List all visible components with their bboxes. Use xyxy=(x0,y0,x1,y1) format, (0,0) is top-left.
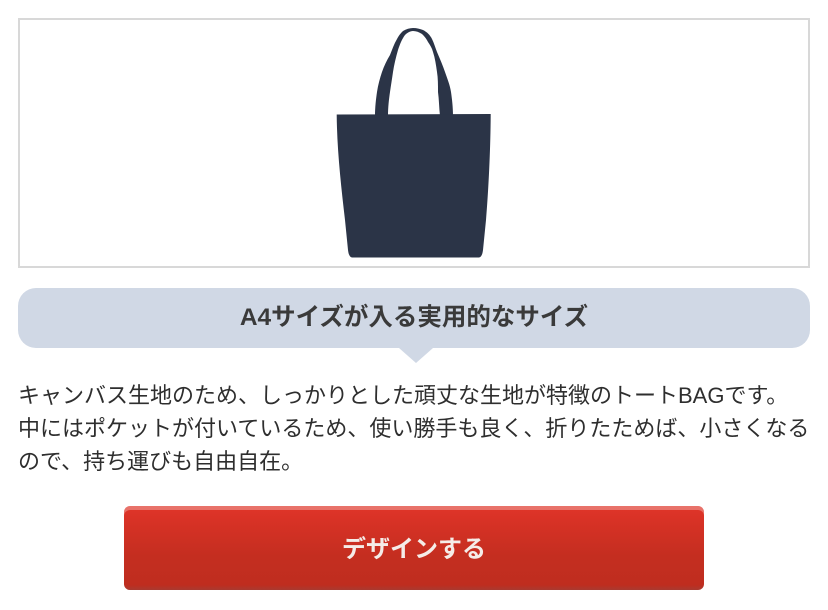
design button: デザインする xyxy=(342,536,486,563)
description text: キャンバス生地のため、しっかりとした頑丈な生地が特徴のトートBAGです。 xyxy=(18,383,788,408)
design button xyxy=(124,506,704,590)
banner pointer xyxy=(399,348,433,363)
product image panel xyxy=(18,18,810,268)
heading banner with pointer xyxy=(18,288,810,363)
heading text: A4サイズが入る実用的なサイズ xyxy=(240,304,588,331)
description text: ので、持ち運びも自由自在。 xyxy=(18,449,303,474)
description text xyxy=(18,383,809,474)
icon: navy tote bag xyxy=(336,28,491,258)
banner background xyxy=(18,288,810,348)
description text: 中にはポケットが付いているため、使い勝手も良く、折りたためば、小さくなる xyxy=(18,416,809,441)
